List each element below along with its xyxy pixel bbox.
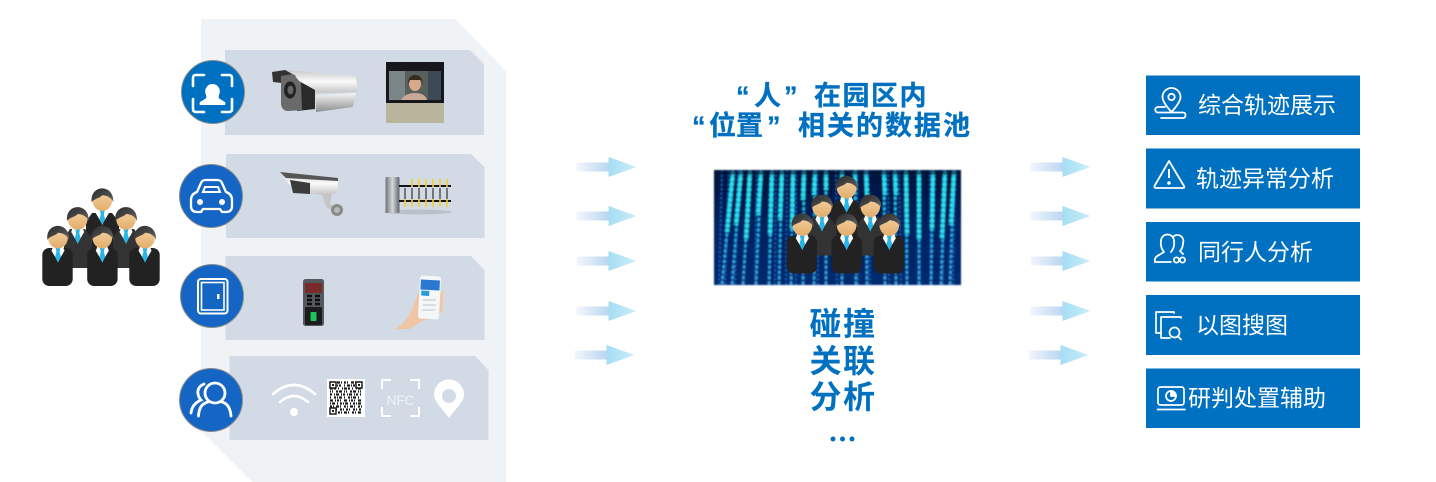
text: collision analysis bbox=[810, 306, 877, 415]
button: search by image bbox=[1146, 295, 1360, 355]
button: companion analysis: 同行人分析 bbox=[1198, 239, 1313, 265]
panel: person device row bbox=[230, 356, 488, 440]
button: track display: 综合轨迹展示 bbox=[1198, 92, 1336, 118]
text: ellipsis dots bbox=[830, 436, 854, 442]
arrows: output bbox=[1028, 157, 1090, 365]
icon: door circle bbox=[180, 264, 244, 328]
text: collision analysis: 碰撞 bbox=[810, 306, 877, 342]
icon: users circle bbox=[180, 368, 242, 432]
panel: face row bbox=[225, 50, 484, 135]
chart image: binary data background with people bbox=[714, 170, 961, 285]
icon: barrier gate bbox=[384, 177, 452, 214]
button: track anomaly: 轨迹异常分析 bbox=[1196, 166, 1334, 192]
heading: data pool title: ” bbox=[767, 111, 780, 141]
icon: bullet camera bbox=[272, 70, 357, 112]
heading: data pool title: 人 bbox=[754, 81, 781, 111]
heading: data pool title bbox=[692, 81, 972, 141]
text: collision analysis: 分析 bbox=[810, 379, 877, 415]
arrows: input bbox=[574, 157, 636, 365]
button: track anomaly bbox=[1146, 148, 1360, 208]
icon: people group left bbox=[42, 188, 160, 286]
heading: data pool title: ” bbox=[784, 81, 798, 111]
heading: data pool title: “ bbox=[692, 111, 706, 141]
button: search by image: 以图搜图 bbox=[1196, 312, 1288, 338]
icon: NFC bbox=[382, 380, 419, 416]
heading: data pool title: 在园区内 bbox=[814, 81, 928, 111]
icon: face recognition terminal bbox=[386, 62, 444, 123]
icon: phone in hand bbox=[396, 275, 444, 329]
icon: car circle bbox=[180, 164, 242, 228]
text: collision analysis: 关联 bbox=[810, 343, 877, 379]
icon: face circle bbox=[182, 60, 244, 124]
heading: data pool title: “ bbox=[736, 81, 750, 111]
icon: NFC: NFC bbox=[387, 393, 415, 408]
panel: data sources background bbox=[201, 19, 506, 482]
button: track display bbox=[1146, 76, 1360, 135]
button: companion analysis bbox=[1146, 222, 1360, 282]
icon: people group center bbox=[787, 176, 904, 274]
icon: wifi bbox=[273, 385, 315, 416]
panel: door access row bbox=[226, 256, 484, 340]
icon: monitor with pie chart bbox=[1158, 387, 1185, 410]
icon: companions bbox=[1155, 234, 1185, 263]
icon: access control reader bbox=[303, 279, 324, 326]
icon: QR code bbox=[327, 379, 365, 417]
icon: surveillance camera bbox=[280, 172, 343, 216]
button: judgment assistance: 研判处置辅助 bbox=[1188, 385, 1326, 411]
panel: vehicle row bbox=[226, 154, 484, 238]
icon: image search bbox=[1156, 312, 1181, 340]
icon: pin on route bbox=[1155, 88, 1186, 118]
icon: location pin bbox=[434, 380, 464, 418]
heading: data pool title: 位置 bbox=[709, 110, 763, 141]
button: judgment assistance bbox=[1146, 368, 1360, 428]
heading: data pool title: 相关的数据池 bbox=[798, 111, 972, 141]
icon: warning triangle bbox=[1154, 161, 1184, 188]
